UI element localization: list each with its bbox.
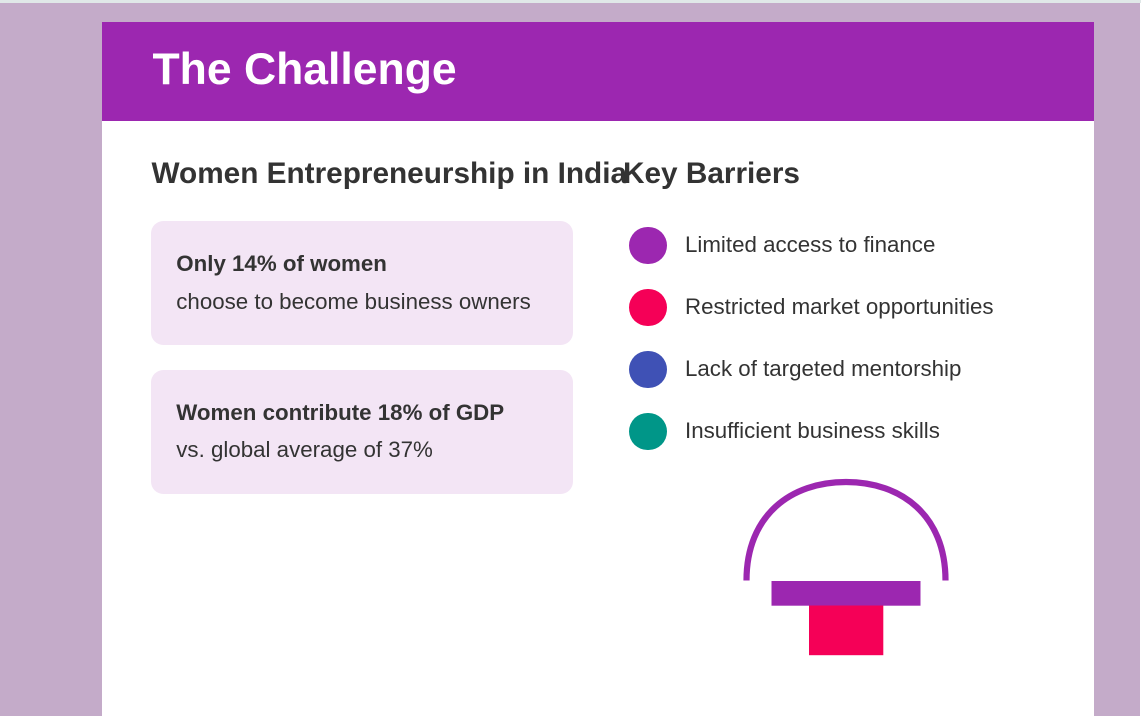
barrier label: Lack of targeted mentorship: [685, 356, 961, 381]
barrier label: Restricted market opportunities: [685, 294, 994, 319]
stat detail: choose to become business owners: [176, 289, 531, 314]
barrier label: Limited access to finance: [685, 232, 935, 257]
barrier: finance: [629, 227, 935, 264]
stat card: 14% of women: [151, 221, 573, 345]
icon: pink dot: [629, 288, 666, 326]
icon: teal dot: [629, 412, 666, 450]
heading: Key Barriers: Key Barriers: [623, 156, 800, 190]
stat headline: Women contribute 18% of GDP: [176, 400, 504, 425]
icon: glass ceiling dome and pedestal: [743, 478, 949, 656]
barrier: market: [629, 289, 994, 326]
header band: [102, 22, 1094, 121]
icon: purple dot: [629, 226, 666, 264]
stat headline: Only 14% of women: [176, 251, 387, 276]
icon: indigo dot: [629, 350, 666, 388]
title: The Challenge: [152, 44, 457, 94]
barrier: mentorship: [629, 351, 961, 388]
barrier label: Insufficient business skills: [685, 418, 940, 443]
stat card: 18% of GDP: [151, 370, 573, 494]
stat detail: vs. global average of 37%: [176, 437, 433, 462]
browser top strip: [0, 0, 1141, 3]
heading: Women Entrepreneurship in India: Women Entrepreneurship in India: [152, 156, 627, 190]
barrier: skills: [629, 413, 940, 450]
